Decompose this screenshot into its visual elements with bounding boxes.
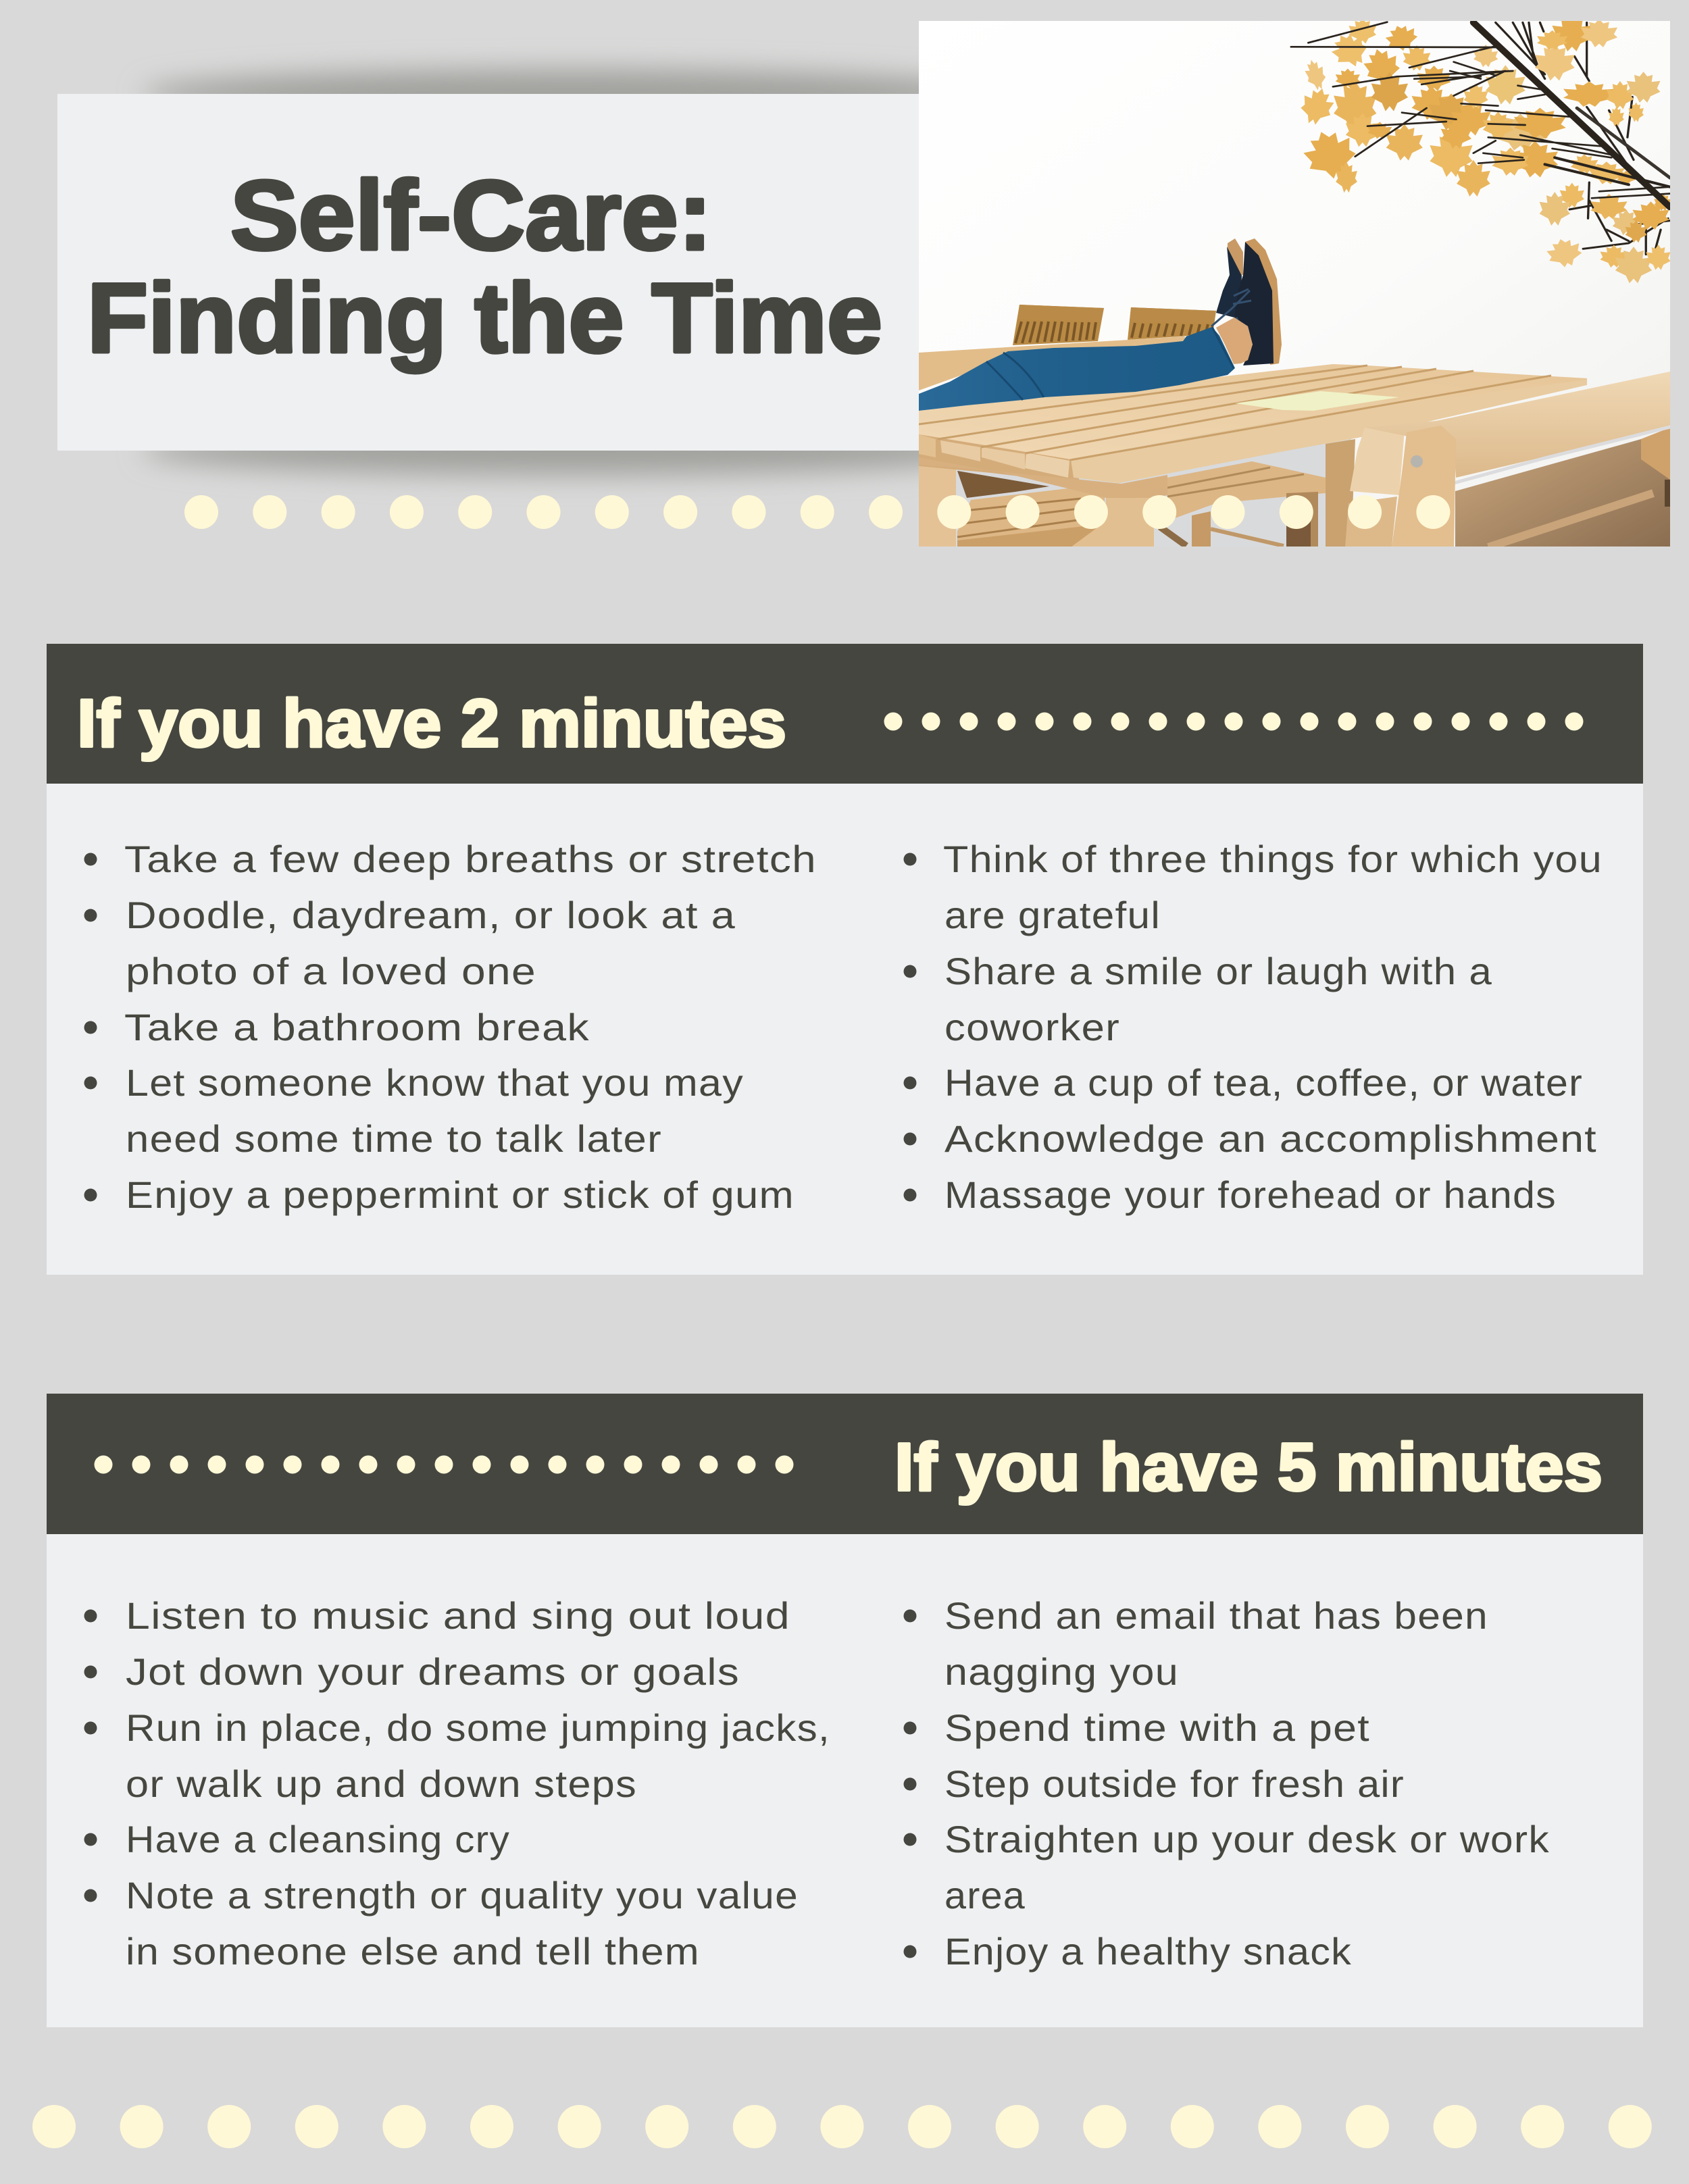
leaves (1297, 15, 1672, 283)
list: 5 minutes right: Straighten up your desk or work (944, 1818, 1550, 1860)
ankle (1216, 318, 1253, 364)
icon: tree with maple leaves (1291, 15, 1672, 283)
panel: if you have 2 minutes (47, 644, 1643, 1275)
icon: chairs (1013, 305, 1216, 345)
list: 5 minutes left: or walk up and down steps (126, 1762, 637, 1805)
header dots (884, 712, 1584, 731)
list: 2 minutes left: Take a few deep breaths or stretch (124, 838, 817, 880)
icon: shoes (1211, 238, 1282, 365)
table surface (919, 364, 1587, 459)
title: Self-Care: (230, 160, 712, 270)
list: 5 minutes right (904, 1594, 1550, 1973)
photo: feet up on wooden table under autumn branches (919, 15, 1672, 547)
list: 5 minutes left: Listen to music and sing out loud (126, 1594, 790, 1637)
list: 5 minutes right: Send an email that has been (944, 1594, 1488, 1637)
list: 2 minutes left (84, 838, 817, 1216)
list: 5 minutes right: Enjoy a healthy snack (944, 1930, 1352, 1973)
title panel (57, 94, 919, 451)
list: 2 minutes left: Take a bathroom break (124, 1006, 590, 1048)
branches over leaves (1291, 22, 1670, 207)
list: 2 minutes left: Enjoy a peppermint or stick of gum (126, 1173, 795, 1216)
list: 2 minutes right: Share a smile or laugh with a (944, 950, 1492, 992)
dotted row at bottom (32, 2105, 1652, 2148)
title shadow bottom (142, 426, 1007, 475)
list: 5 minutes right: area (944, 1874, 1026, 1916)
list: 2 minutes right: Acknowledge an accomplishment (944, 1117, 1597, 1160)
list: 5 minutes left: Note a strength or quality you value (126, 1874, 799, 1916)
list: 2 minutes right: are grateful (944, 894, 1161, 936)
title (87, 160, 882, 373)
list: 2 minutes right: coworker (944, 1006, 1120, 1048)
branches behind leaves (1496, 22, 1670, 255)
back bench (919, 336, 1189, 390)
dotted row under title (184, 495, 1450, 529)
title shadow top (142, 70, 1007, 118)
list: 5 minutes left: Run in place, do some jumping jacks, (126, 1706, 830, 1749)
list: 5 minutes right: Step outside for fresh air (944, 1762, 1405, 1805)
list: 2 minutes right: Have a cup of tea, coffee, or water (944, 1061, 1583, 1104)
list: 5 minutes left (84, 1594, 830, 1973)
list: 2 minutes right (904, 838, 1603, 1216)
heading: 2 minutes: If you have 2 minutes (77, 686, 786, 761)
foreground bench (1345, 372, 1670, 547)
list: 2 minutes left: need some time to talk later (126, 1117, 662, 1160)
list: 2 minutes right: Think of three things for which you (943, 838, 1603, 880)
list: 5 minutes left: Jot down your dreams or goals (126, 1650, 740, 1693)
list: 5 minutes left: in someone else and tell them (126, 1930, 700, 1973)
floor gap under table (946, 432, 1351, 547)
icon: leg in jeans (919, 327, 1235, 411)
list: 2 minutes right: Massage your forehead or hands (944, 1173, 1557, 1216)
header dots (95, 1455, 793, 1474)
list: 2 minutes left: Let someone know that you may (126, 1061, 744, 1104)
list: 2 minutes left: photo of a loved one (126, 950, 536, 992)
sticky note (1235, 391, 1399, 411)
list: 2 minutes left: Doodle, daydream, or look at a (126, 894, 736, 936)
list: 5 minutes right: Spend time with a pet (944, 1706, 1370, 1749)
title: Finding the Time (87, 263, 882, 373)
heading: 5 minutes: If you have 5 minutes (894, 1429, 1603, 1505)
icon: wooden table (919, 364, 1587, 547)
list: 5 minutes right: nagging you (944, 1650, 1179, 1693)
table legs and benches (957, 471, 1049, 498)
panel: if you have 5 minutes (47, 1394, 1643, 2027)
list: 5 minutes left: Have a cleansing cry (126, 1818, 510, 1860)
